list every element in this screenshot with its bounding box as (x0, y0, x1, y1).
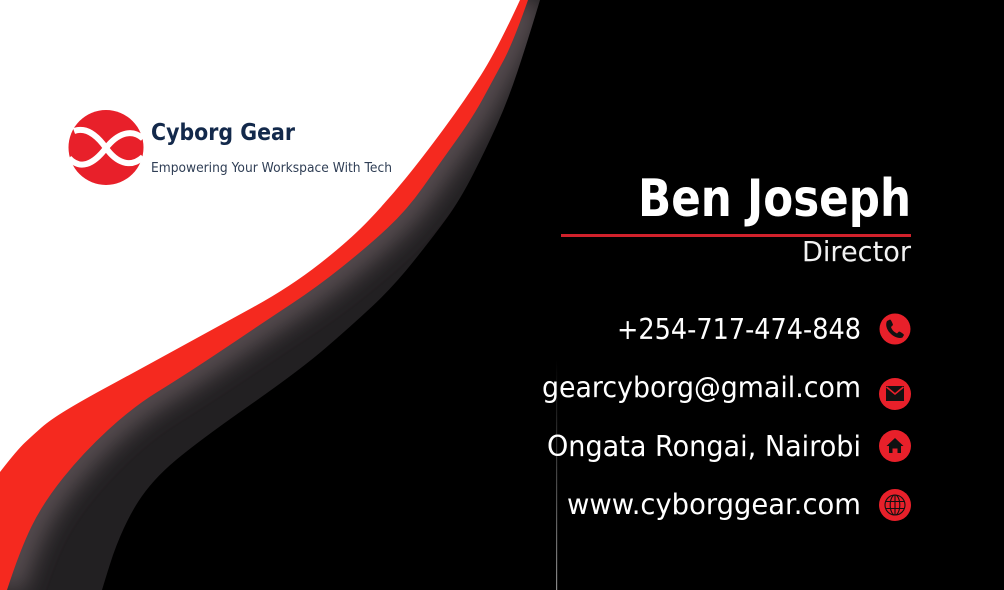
job title: Director (802, 236, 912, 268)
street address: Ongata Rongai, Nairobi (547, 430, 861, 463)
dark grey wave (7, 0, 540, 590)
web address: www.cyborggear.com (567, 488, 861, 521)
divider (561, 234, 911, 237)
red wave (0, 0, 528, 590)
icon: house (879, 430, 911, 462)
name: Ben Joseph (638, 169, 911, 229)
logo tagline: Empowering Your Workspace With Tech (151, 160, 392, 176)
contact: website (567, 488, 911, 521)
contact: email (542, 371, 911, 410)
contact: address (547, 430, 911, 463)
thin vertical line (556, 360, 557, 590)
icon: globe (879, 489, 911, 521)
logo mark (68, 110, 144, 185)
email address: gearcyborg@gmail.com (542, 371, 861, 404)
icon: envelope (879, 378, 911, 410)
white curved panel (0, 0, 520, 472)
contact: phone (617, 313, 910, 346)
phone number: +254-717-474-848 (617, 313, 861, 346)
logo name: Cyborg Gear (151, 120, 296, 146)
logo (68, 110, 392, 185)
icon: phone (880, 314, 910, 344)
